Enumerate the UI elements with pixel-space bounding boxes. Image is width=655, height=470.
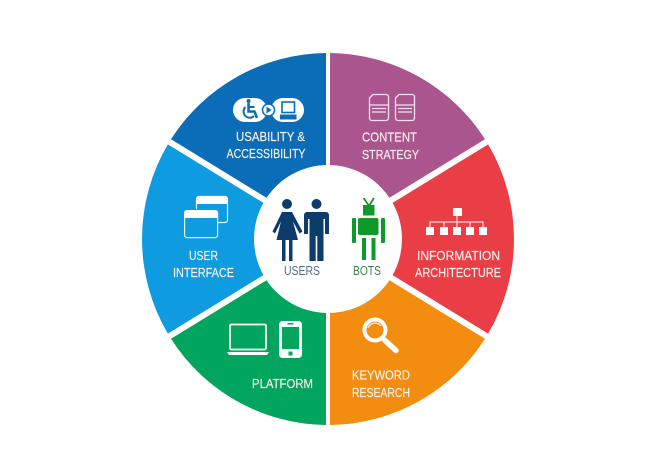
icon: browser windows: [184, 196, 228, 238]
panel: user interface: [142, 144, 263, 334]
label: usability and accessibility: USABILITY &: [236, 129, 305, 144]
label: information architecture: INFORMATION: [417, 248, 500, 263]
icon: male user: [304, 199, 329, 261]
panel: usability and accessibility: [171, 53, 326, 198]
label: user interface: [173, 248, 234, 280]
label: information architecture: [415, 248, 501, 280]
label: content strategy: [362, 130, 419, 162]
label: bots: BOTS: [353, 263, 381, 278]
icon: documents: [370, 94, 414, 120]
label: platform: PLATFORM: [252, 376, 313, 391]
label: information architecture: ARCHITECTURE: [415, 265, 501, 280]
icon: wheelchair to computer: [233, 98, 304, 122]
label: content strategy: CONTENT: [362, 130, 417, 144]
label: user interface: INTERFACE: [173, 265, 234, 280]
label: usability and accessibility: [226, 129, 306, 161]
icon: magnifying glass: [364, 320, 396, 350]
icon: hierarchy chart: [426, 208, 487, 235]
label: user interface: USER: [189, 248, 218, 263]
icon: robot: [352, 198, 385, 260]
label: keyword research: RESEARCH: [352, 385, 410, 400]
label: usability and accessibility: ACCESSIBILITY: [226, 146, 306, 161]
panel: platform: [171, 280, 326, 425]
label: keyword research: KEYWORD: [352, 368, 410, 382]
icon: laptop and phone: [227, 321, 302, 358]
panel: keyword research: [330, 280, 485, 425]
label: users: USERS: [284, 263, 320, 278]
icon: female user: [272, 199, 302, 261]
label: content strategy: STRATEGY: [362, 147, 419, 162]
label: keyword research: [352, 368, 410, 400]
panel: information architecture: [393, 144, 514, 334]
panel: content strategy: [330, 53, 485, 198]
